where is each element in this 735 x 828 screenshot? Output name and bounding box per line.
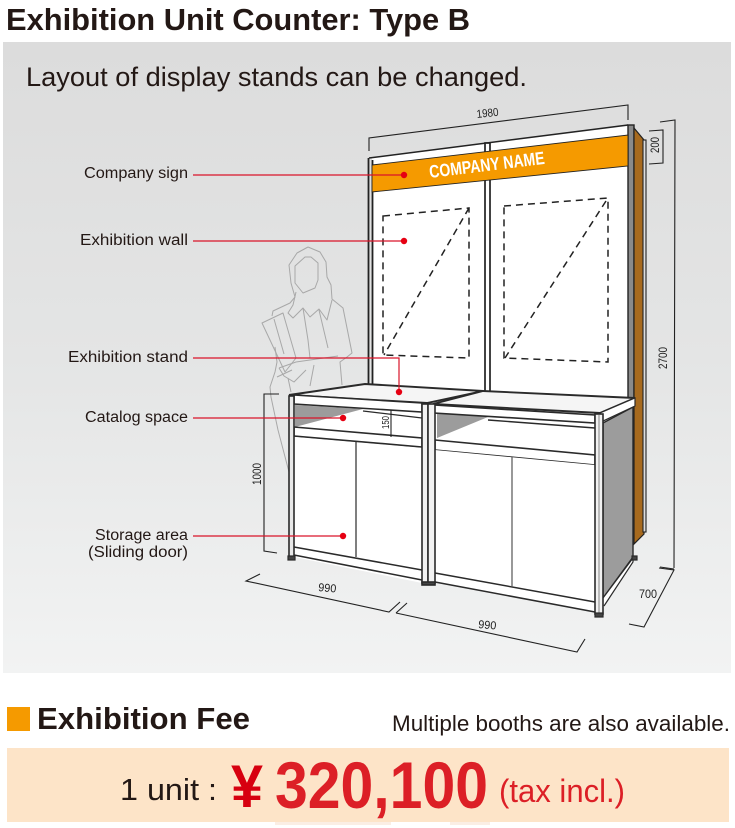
dimension: 150 <box>380 410 392 437</box>
price value: 320,100 <box>275 748 488 822</box>
callout: storage area: (Sliding door) <box>88 544 188 561</box>
icon: orange section marker <box>7 707 30 731</box>
dimension: 1980: 1980 <box>476 107 499 121</box>
panel subtitle: Layout of display stands can be changed. <box>26 62 527 92</box>
dimension: 1000 <box>252 394 279 553</box>
counter: exhibition stands <box>288 384 637 617</box>
exhibition wall <box>368 125 646 544</box>
heading: exhibition fee: Exhibition Fee <box>37 701 250 736</box>
callout: exhibition stand: Exhibition stand <box>68 349 188 366</box>
right counter unit <box>433 391 637 617</box>
price label: 1 unit : <box>120 772 217 807</box>
note: multiple booths: Multiple booths are also available. <box>392 711 730 736</box>
illustration: person silhouette <box>262 247 352 472</box>
dimension: 2700 <box>658 120 675 569</box>
left counter unit <box>288 384 483 583</box>
callout: exhibition wall <box>80 232 407 249</box>
dimension: 200: 200 <box>650 137 662 153</box>
wall side panel <box>634 128 646 544</box>
dimension: 990 right: 990 <box>478 619 497 633</box>
callout: storage area <box>88 527 346 561</box>
dimension lines <box>246 105 675 652</box>
dimension: 990 left: 990 <box>318 582 337 596</box>
callout: storage area: Storage area <box>95 527 188 544</box>
dashed panel frames <box>383 198 608 362</box>
callout: company sign <box>84 165 407 182</box>
callout: catalog space <box>85 409 346 426</box>
tax note: (tax incl.) <box>499 773 625 809</box>
dimension: 1980 <box>369 105 628 151</box>
callout: exhibition wall: Exhibition wall <box>80 232 188 249</box>
panel: booth diagram <box>3 42 731 673</box>
price value: ¥ <box>231 753 264 820</box>
centre posts <box>422 404 435 585</box>
dimension: 2700: 2700 <box>658 347 670 369</box>
panel: price <box>7 748 729 825</box>
dimension: 700 <box>629 568 674 627</box>
dimension: 200 <box>649 130 663 164</box>
company sign band <box>372 135 628 192</box>
dimension: 990 right <box>396 603 585 652</box>
company sign band: COMPANY NAME <box>428 148 546 182</box>
callout: catalog space: Catalog space <box>85 409 188 426</box>
dimension: 1000: 1000 <box>252 463 264 485</box>
dimension: 150: 150 <box>380 416 392 429</box>
dimension: 990 left <box>246 574 400 612</box>
wall posts <box>368 125 634 405</box>
callout: company sign: Company sign <box>84 165 188 182</box>
dimension: 700: 700 <box>639 589 657 601</box>
callout: exhibition stand <box>68 349 402 395</box>
title: Exhibition Unit Counter: Type B <box>6 2 470 37</box>
